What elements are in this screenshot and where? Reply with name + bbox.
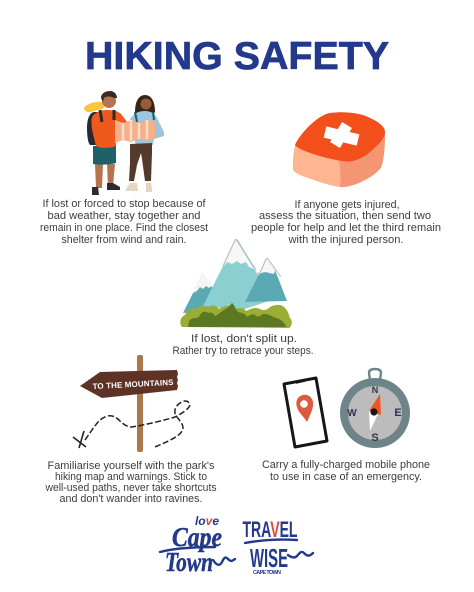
logo: Travel Wise Cape Town: CAPE TOWN	[253, 570, 281, 576]
text: mobile phone: to use in case of an emergency.	[270, 471, 422, 483]
title: HIKING SAFETY	[85, 35, 389, 78]
bushes	[180, 305, 292, 328]
text: don't split up	[172, 333, 314, 357]
text: injury advice	[251, 199, 441, 246]
icon: compass: N	[372, 385, 378, 395]
text: injury advice: people for help and let the third remain	[251, 222, 441, 234]
dashed trail	[85, 401, 190, 447]
icon: compass	[340, 369, 410, 448]
icon: phone with location pin	[284, 378, 327, 447]
text: mobile phone: Carry a fully-charged mobile phone	[262, 459, 430, 471]
logo: Travel Wise Cape Town: WISE	[250, 543, 288, 573]
icon: compass: W	[347, 408, 357, 419]
folded map	[115, 120, 155, 143]
text: map and paths	[45, 460, 217, 505]
text: stay together: bad weather, stay together and	[48, 210, 200, 222]
text: map and paths: and don't wander into ravines.	[60, 493, 202, 505]
icon: first aid kit	[293, 112, 385, 187]
X mark	[73, 431, 86, 448]
text: mobile phone	[262, 459, 430, 483]
logo: Travel Wise Cape Town	[242, 517, 313, 576]
icon: two hikers with map	[84, 91, 164, 195]
white cross	[325, 125, 358, 145]
text: injury advice: assess the situation, then send two	[259, 210, 431, 222]
text: map and paths: hiking map and warnings. Stick to	[55, 471, 207, 483]
hiker: woman in blue	[126, 95, 164, 192]
text: stay together: If lost or forced to stop because of	[42, 198, 206, 210]
hiker: man with backpack	[84, 91, 128, 195]
text: stay together: shelter from wind and rain.	[62, 234, 186, 246]
icon: signpost with dashed trail	[73, 355, 190, 452]
logo: Love Cape Town: Cape	[172, 522, 222, 552]
icon: signpost with dashed trail: TO THE MOUNTAINS	[92, 378, 174, 391]
text: don't split up: Rather try to retrace your steps.	[172, 345, 314, 357]
logo: Travel Wise Cape Town: TRAVEL	[242, 517, 298, 542]
icon: compass: S	[371, 432, 379, 444]
text: stay together: remain in one place. Find the closest	[40, 222, 208, 234]
logo: Love Cape Town	[160, 514, 235, 577]
logo: Love Cape Town: Town	[165, 547, 213, 577]
text: injury advice: with the injured person.	[287, 234, 404, 246]
text: stay together	[40, 198, 208, 246]
icon: compass: E	[394, 407, 402, 419]
text: map and paths: well-used paths, never take shortcuts	[45, 482, 217, 494]
text: map and paths: Familiarise yourself with the park's	[48, 460, 215, 472]
text: injury advice: If anyone gets injured,	[294, 199, 400, 211]
logo: Love Cape Town: love	[195, 514, 219, 528]
text: don't split up: If lost, don't split up.	[191, 333, 297, 345]
icon: mountains	[180, 240, 292, 328]
